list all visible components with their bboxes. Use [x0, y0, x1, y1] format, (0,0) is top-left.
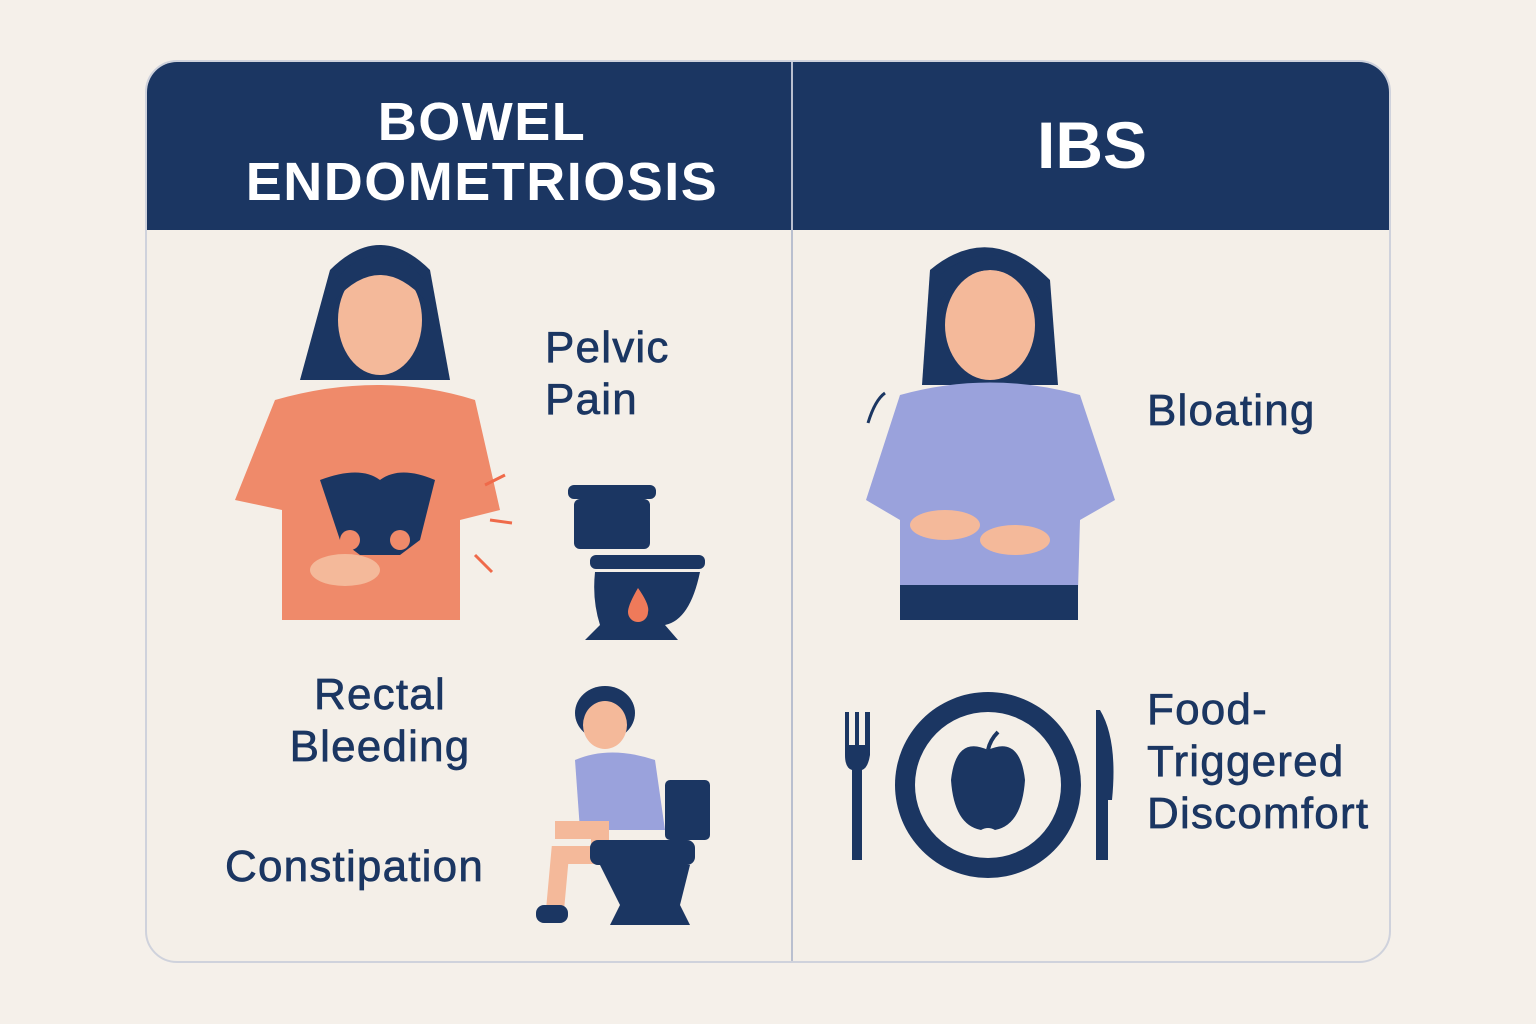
title: bowel endometriosis: BOWEL — [378, 92, 586, 152]
icon: woman with pelvic pain — [235, 245, 512, 620]
label: rectal bleeding — [290, 670, 470, 771]
label: food-triggered discomfort: Triggered — [1147, 737, 1344, 786]
label: food-triggered discomfort: Food- — [1147, 685, 1268, 734]
panel: comparison card — [145, 60, 1391, 963]
label: pelvic pain: Pelvic — [545, 323, 670, 372]
label: constipation: Constipation — [225, 842, 484, 891]
icon: plate with apple and cutlery — [845, 692, 1114, 878]
icon: person sitting on toilet — [536, 686, 710, 925]
label: food-triggered discomfort — [1147, 685, 1369, 838]
title: bowel endometriosis — [246, 92, 718, 212]
title: bowel endometriosis: ENDOMETRIOSIS — [246, 152, 718, 212]
label: pelvic pain — [545, 323, 670, 424]
label: rectal bleeding: Bleeding — [290, 722, 470, 771]
label: rectal bleeding: Rectal — [314, 670, 446, 719]
divider — [791, 62, 793, 965]
icon: toilet with blood drop — [568, 485, 705, 640]
icon: bloated woman — [866, 247, 1115, 620]
label: bloating: Bloating — [1147, 386, 1316, 435]
label: food-triggered discomfort: Discomfort — [1147, 789, 1369, 838]
label: pelvic pain: Pain — [545, 375, 638, 424]
header bar — [147, 62, 1389, 230]
title: IBS: IBS — [1037, 108, 1147, 182]
